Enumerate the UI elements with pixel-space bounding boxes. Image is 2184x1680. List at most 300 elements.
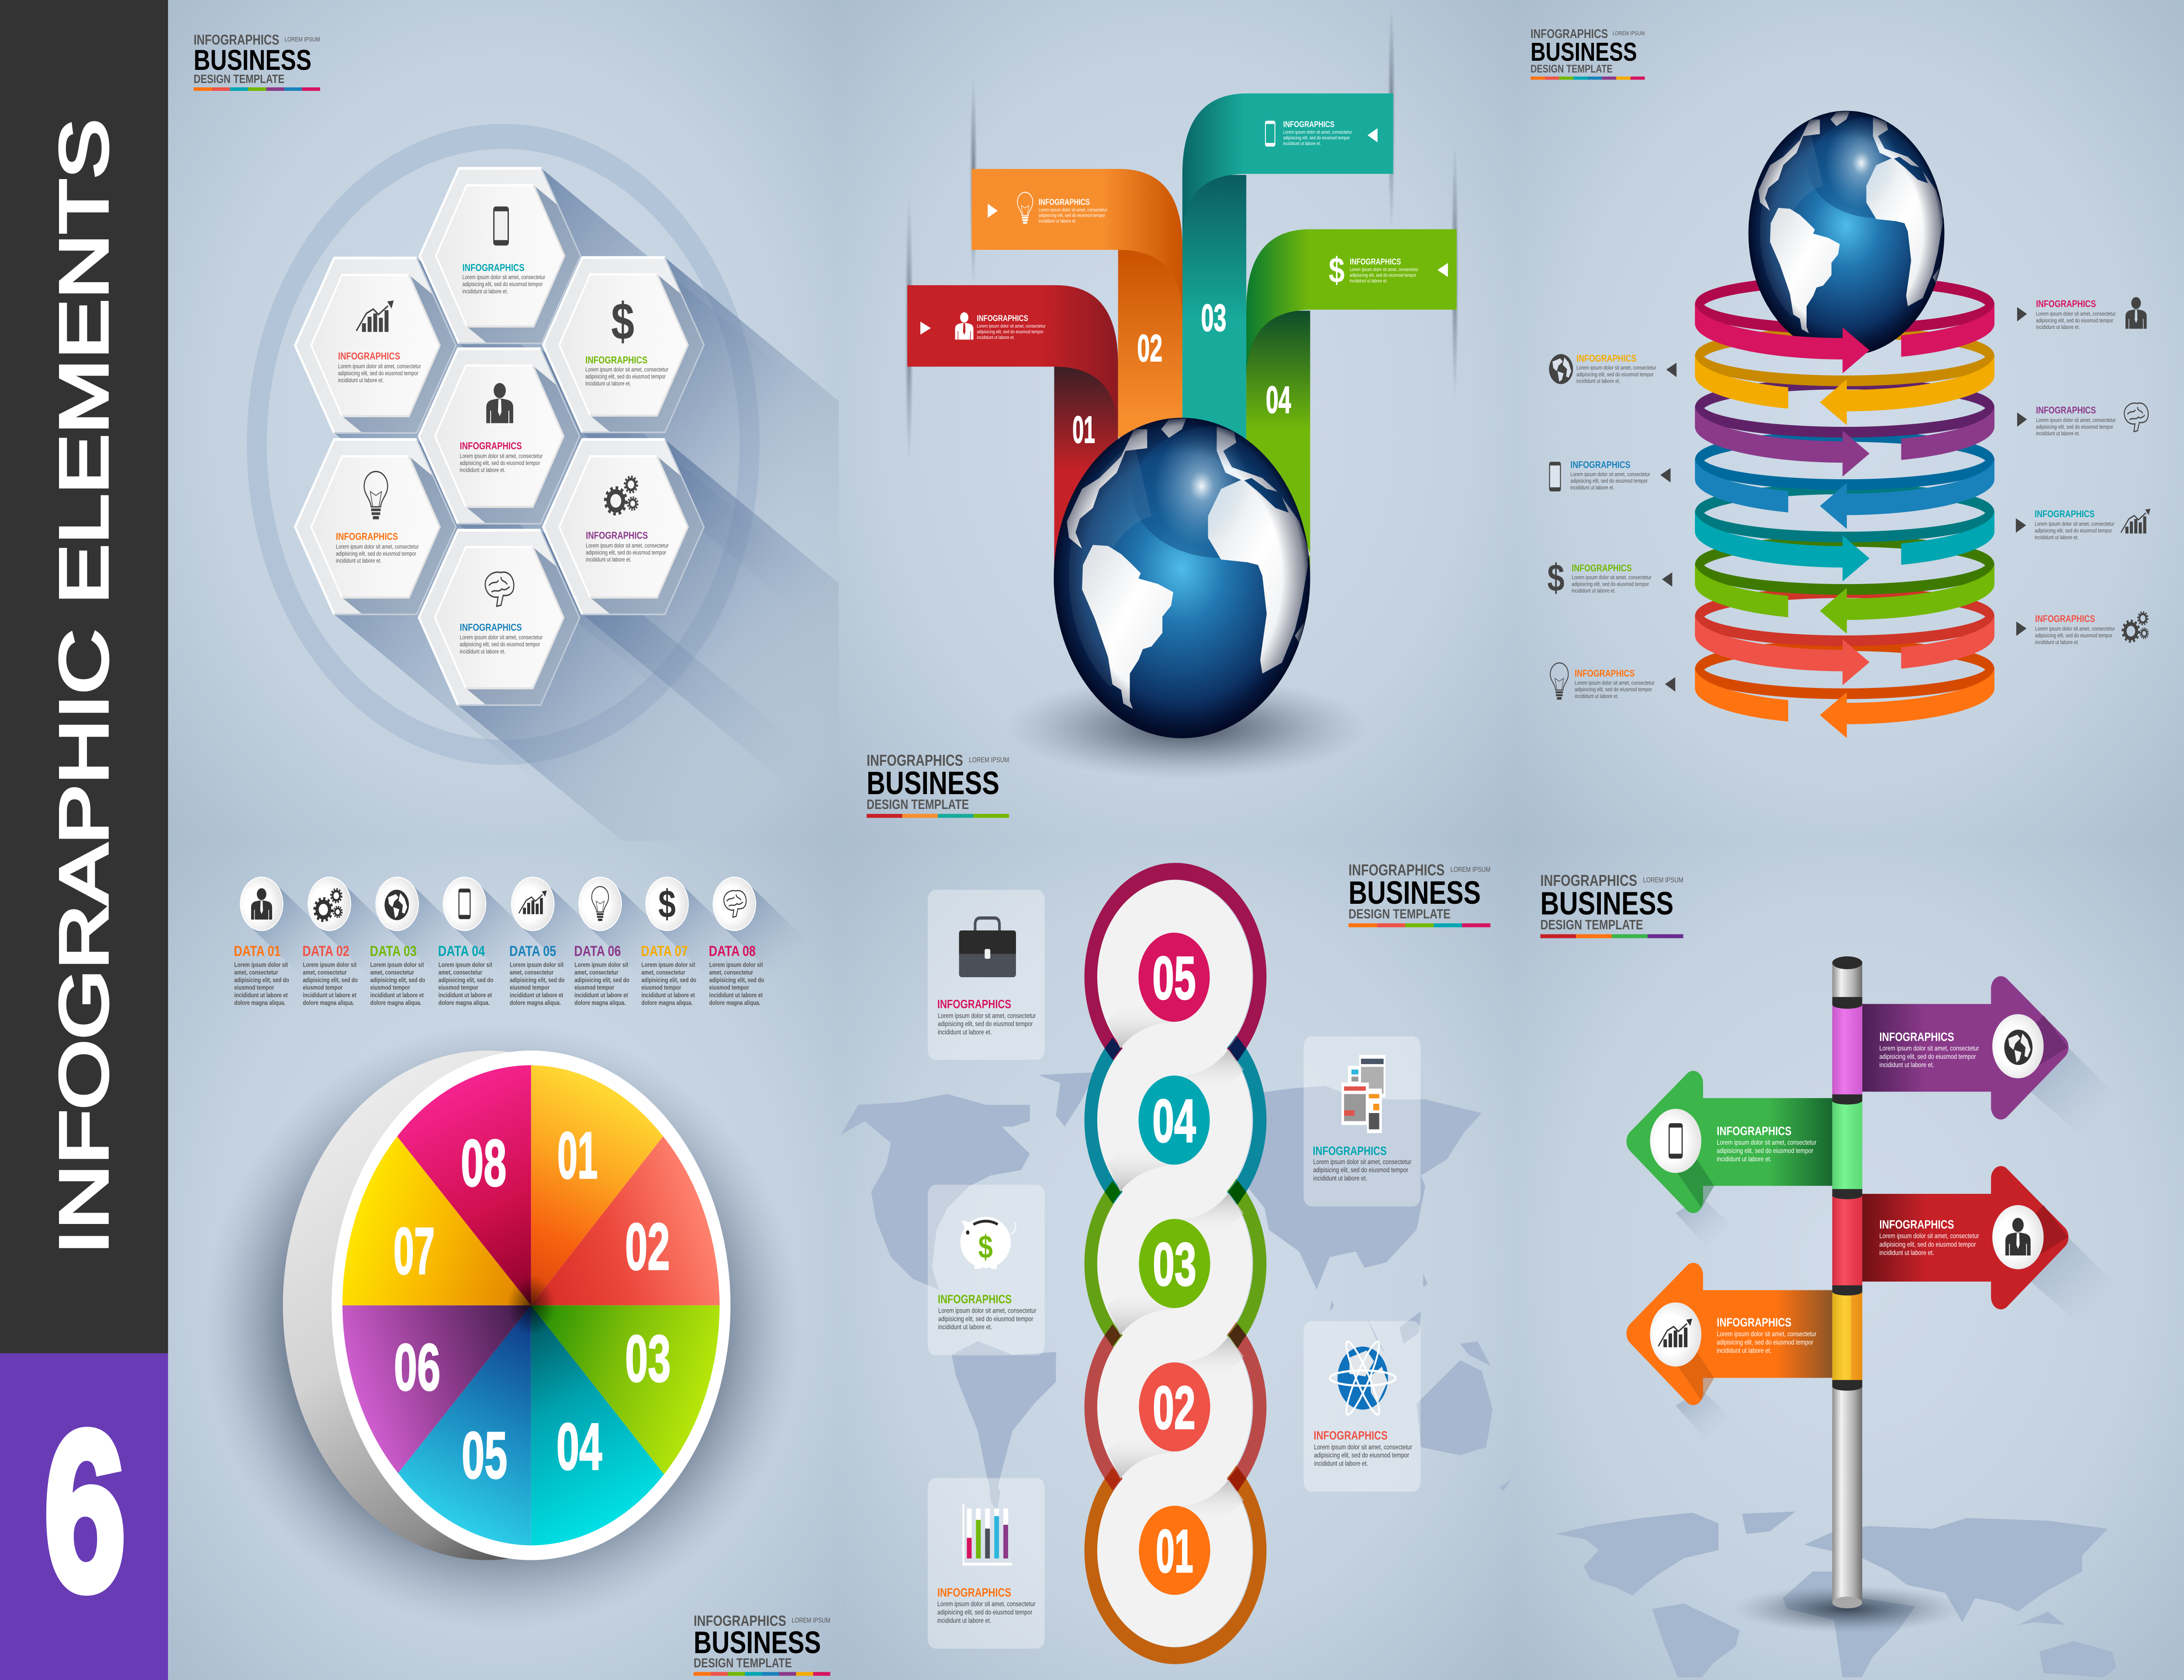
icon: piggy bank [961,1217,1016,1269]
globe [1749,111,1944,356]
data 08: eiusmod tempor [709,984,749,991]
logo: panel 3: INFOGRAPHICS [1531,26,1608,41]
text: centre hexagon: INFOGRAPHICS [460,441,522,452]
right arrow 1 [2017,307,2027,321]
text: right 2: Lorem ipsum dolor sit amet, consectetur [2036,417,2116,423]
text: left lower hexagon: incididunt ut labore et. [336,557,381,564]
panel: pie wheel [169,841,840,1680]
world map [1556,1511,2116,1677]
badge 05: 05 [1152,944,1196,1012]
text: right 3: incididunt ut labore et. [2035,534,2079,541]
logo: panel 1: LOREM IPSUM [284,36,320,43]
number 04: 04 [1266,379,1291,421]
data 05: Lorem ipsum dolor sit [510,961,564,968]
data 03: DATA 03 [370,943,417,959]
data 04: incididunt ut labore et [439,992,492,999]
badge 02 [1139,1362,1210,1452]
arrow: orange ribbon [988,204,998,218]
text: right 2 [2036,405,2116,437]
arrow: orange [1636,1275,1832,1400]
data 07: adipisicing elit, sed do [641,976,696,984]
data 01: DATA 01 [234,943,281,959]
text: orange ribbon: INFOGRAPHICS [1039,197,1090,207]
text: left lower hexagon [336,531,419,564]
text: orange arrow [1717,1316,1817,1355]
text: top hexagon [463,263,545,295]
text: right upper hexagon: adipisicing elit, sed do eiusmod tempor [585,373,666,380]
pie white rim [332,1051,730,1560]
data 07: incididunt ut labore et [641,992,695,999]
data 01 [234,877,289,1006]
text: left 4 [1575,668,1655,699]
number 03: 03 [625,1322,671,1396]
logo: panel 1 [194,32,320,91]
left arrow 4 [1665,677,1675,691]
icon: phone white [1265,121,1275,146]
text: orange ribbon: adipisicing elit, sed do eiusmod tempor [1039,213,1106,218]
text: green arrow [1717,1124,1817,1163]
data 02: DATA 02 [302,943,349,959]
ring 7 coral [1695,593,1994,685]
text: card 01: incididunt ut labore et. [937,1617,991,1625]
text: left 3: INFOGRAPHICS [1572,563,1632,574]
text: left lower hexagon: Lorem ipsum dolor sit amet, consectetur [336,543,419,550]
text: orange arrow: Lorem ipsum dolor sit amet, consectetur [1717,1331,1817,1338]
text: left lower hexagon: adipisicing elit, sed do eiusmod tempor [336,550,416,557]
logo: panel 3: DESIGN TEMPLATE [1531,63,1613,75]
data 07: amet, consectetur [641,969,685,976]
text: right 4: INFOGRAPHICS [2035,614,2095,625]
text: left upper hexagon: incididunt ut labore et. [338,377,384,384]
text: card 04 [1313,1144,1411,1182]
data 06: incididunt ut labore et [574,992,628,999]
ring 2 yellow [1695,333,1994,425]
text: top hexagon: INFOGRAPHICS [463,263,525,273]
data 08: Lorem ipsum dolor sit [709,961,763,968]
pie side wall [283,1051,691,1560]
logo: panel 5: INFOGRAPHICS [1348,861,1444,879]
text: right 4: adipisicing elit, sed do eiusmod tempor [2035,633,2112,639]
data 04: DATA 04 [438,943,485,959]
text: green ribbon: Lorem ipsum dolor sit amet, consectetur [1350,267,1419,273]
arrow: red [1862,1179,2068,1297]
text: bottom hexagon: adipisicing elit, sed do eiusmod tempor [460,641,540,648]
data 07: $ [658,883,676,926]
data 02: amet, consectetur [303,969,347,976]
ribbon 01 red [907,285,1118,578]
signpost pole [1832,956,1862,1608]
text: red ribbon: INFOGRAPHICS [977,313,1028,323]
text: right 1 [2036,299,2116,330]
logo: panel 4: LOREM IPSUM [792,1617,830,1625]
text: right lower hexagon: INFOGRAPHICS [586,530,648,541]
logo: panel 5: BUSINESS [1348,875,1481,911]
badge 04 [1138,1075,1210,1165]
logo: panel 2: DESIGN TEMPLATE [867,797,969,812]
icon: dollar: $ [611,292,634,351]
text: left 4: Lorem ipsum dolor sit amet, consectetur [1575,680,1655,686]
text: card 05: Lorem ipsum dolor sit amet, consectetur [938,1012,1036,1020]
text: card 03: Lorem ipsum dolor sit amet, consectetur [938,1307,1037,1315]
data 01: amet, consectetur [234,969,278,976]
text: teal ribbon [1283,119,1352,146]
text: top hexagon: Lorem ipsum dolor sit amet, consectetur [463,274,545,281]
data 07: dolore magna aliqua. [641,999,693,1006]
text: orange ribbon: Lorem ipsum dolor sit amet, consectetur [1039,207,1108,213]
text: left lower hexagon: INFOGRAPHICS [336,531,398,543]
logo: panel 2 [867,751,1009,818]
ring 5 teal [1695,489,1994,581]
data 03: amet, consectetur [370,969,414,976]
sidebar: dark title bar [0,0,168,1353]
text: teal ribbon: Lorem ipsum dolor sit amet, consectetur [1283,130,1352,135]
data 08: incididunt ut labore et [709,992,763,999]
text: top hexagon: adipisicing elit, sed do eiusmod tempor [463,281,543,288]
text: red arrow: incididunt ut labore et. [1880,1249,1934,1257]
text: green ribbon: adipisicing elit, sed do eiusmod tempor [1350,273,1417,278]
text: card 04: incididunt ut labore et. [1313,1175,1367,1182]
number 01: 01 [1072,408,1095,451]
data 08: dolore magna aliqua. [709,999,760,1006]
right arrow 3 [2016,519,2026,533]
text: centre hexagon [460,441,543,474]
text: left 4: INFOGRAPHICS [1575,668,1635,679]
text: red arrow: adipisicing elit, sed do eiusmod tempor [1880,1241,1976,1248]
data 05: amet, consectetur [510,969,553,976]
data 01: dolore magna aliqua. [234,999,285,1006]
icon: brain [2124,403,2148,432]
badge 05 [1138,933,1210,1022]
text: purple arrow: INFOGRAPHICS [1880,1030,1954,1044]
text: right lower hexagon: Lorem ipsum dolor sit amet, consectetur [586,542,669,549]
logo: panel 4: DESIGN TEMPLATE [694,1656,792,1670]
big number 6: 6 [44,1385,126,1636]
text: card 01: adipisicing elit, sed do eiusmod tempor [937,1609,1033,1616]
data 02: dolore magna aliqua. [303,999,354,1006]
icon: bar chart [963,1504,1012,1566]
ring 8 orange [1695,646,1994,738]
icon: bulb [364,471,387,519]
left arrow 1 [1666,363,1676,377]
chain rings [1091,871,1260,1656]
globe [1054,418,1310,738]
logo: panel 1: DESIGN TEMPLATE [194,73,284,86]
icon: globe [1549,354,1573,384]
text: right 1: INFOGRAPHICS [2036,299,2096,309]
ring 4 blue [1695,436,1994,529]
text: right lower hexagon [586,530,669,563]
text: teal ribbon: incididunt ut labore et. [1283,141,1321,146]
text: left upper hexagon: INFOGRAPHICS [338,351,400,362]
text: card 02: adipisicing elit, sed do eiusmod tempor [1314,1452,1409,1459]
text: left 1: incididunt ut labore et. [1576,378,1620,384]
text: green arrow: Lorem ipsum dolor sit amet, consectetur [1717,1139,1817,1147]
text: card 04: adipisicing elit, sed do eiusmod tempor [1313,1166,1408,1174]
text: red ribbon [977,313,1046,340]
text: green arrow: incididunt ut labore et. [1717,1155,1772,1163]
data 06 [574,877,629,1006]
text: card 01: Lorem ipsum dolor sit amet, consectetur [937,1600,1036,1608]
icon: person [486,383,513,423]
data 02: incididunt ut labore et [303,992,356,999]
pole shadow [1732,1585,1963,1633]
text: left 1 [1576,353,1656,384]
data 08: amet, consectetur [709,969,753,976]
right arrow 2 [2017,412,2027,427]
text: green ribbon: INFOGRAPHICS [1350,257,1401,266]
text: left 2: incididunt ut labore et. [1570,484,1614,491]
logo: panel 6: BUSINESS [1540,885,1673,922]
white discs [1097,880,1252,1647]
data 05: adipisicing elit, sed do [510,976,565,984]
text: left 3: incididunt ut labore et. [1572,588,1616,594]
text: orange ribbon [1039,197,1108,224]
text: centre hexagon: adipisicing elit, sed do eiusmod tempor [460,460,540,467]
data 05 [509,877,565,1006]
pie wedges [342,1065,719,1545]
logo: panel 3: LOREM IPSUM [1613,30,1645,37]
text: left 3: Lorem ipsum dolor sit amet, consectetur [1572,574,1652,581]
data 01: Lorem ipsum dolor sit [234,961,288,968]
icon: atom globe [1330,1338,1396,1418]
arrow shadows [1676,1047,2125,1443]
text: left 3: adipisicing elit, sed do eiusmod tempor [1572,581,1649,588]
data 03: adipisicing elit, sed do [370,976,425,984]
data 02: eiusmod tempor [303,984,343,991]
badge 01: 01 [1156,1517,1193,1585]
text: red arrow: INFOGRAPHICS [1880,1218,1954,1231]
icon: gears [605,477,638,514]
number 07: 07 [394,1214,435,1288]
text: orange arrow: adipisicing elit, sed do eiusmod tempor [1717,1339,1813,1346]
data 05: DATA 05 [509,943,556,959]
data 01: adipisicing elit, sed do [234,976,289,984]
text: card 02: INFOGRAPHICS [1313,1429,1388,1442]
text: left 1: adipisicing elit, sed do eiusmod tempor [1576,371,1654,378]
text: right 4 [2035,614,2115,646]
data 07: eiusmod tempor [641,984,681,991]
number 06: 06 [394,1331,440,1404]
text: left 1: Lorem ipsum dolor sit amet, consectetur [1576,365,1656,371]
text: card 03: incididunt ut labore et. [938,1324,992,1331]
data 04: eiusmod tempor [439,984,478,991]
data 08: adipisicing elit, sed do [709,976,764,984]
text: bottom hexagon: Lorem ipsum dolor sit amet, consectetur [460,634,543,641]
text: red ribbon: adipisicing elit, sed do eiusmod tempor [977,329,1044,335]
logo: panel 2: BUSINESS [867,765,999,802]
text: left 3 [1572,563,1652,594]
data 06: DATA 06 [574,943,621,959]
text: right lower hexagon: adipisicing elit, sed do eiusmod tempor [586,549,666,556]
text: card 05 [937,998,1036,1036]
ring 1 front pink [1695,302,1994,373]
data 04: dolore magna aliqua. [439,999,490,1006]
world map [841,1072,1512,1512]
number 02: 02 [1137,327,1162,370]
data 02: Lorem ipsum dolor sit [303,961,357,968]
icon: phone [1549,462,1561,491]
data 07: Lorem ipsum dolor sit [641,961,695,968]
text: right 3: Lorem ipsum dolor sit amet, consectetur [2035,521,2115,527]
text: left upper hexagon [338,351,421,384]
text: left 2: Lorem ipsum dolor sit amet, consectetur [1570,471,1650,477]
badge 03 [1139,1219,1210,1308]
text: red ribbon: incididunt ut labore et. [977,335,1015,340]
arrow: green ribbon [1438,263,1448,277]
icon: chart [356,301,394,332]
text: right 1: adipisicing elit, sed do eiusmod tempor [2036,318,2113,324]
text: card 01 [937,1586,1036,1625]
badge 02: 02 [1153,1374,1196,1441]
text: green ribbon: incididunt ut labore et. [1350,279,1388,284]
data 02: adipisicing elit, sed do [303,976,358,984]
ribbon 03 teal [1182,93,1393,441]
icon: brain [485,572,514,606]
ribbon 02 orange [971,169,1182,437]
logo: panel 1: BUSINESS [194,44,311,76]
text: right 4: incididunt ut labore et. [2035,639,2079,646]
data 04: adipisicing elit, sed do [439,976,493,984]
data 06: Lorem ipsum dolor sit [574,961,629,968]
text: centre hexagon: incididunt ut labore et. [460,467,505,474]
number 01: 01 [557,1119,598,1193]
panel: hexagon infographic [169,0,839,841]
number 02: 02 [625,1210,670,1284]
ribbon 04 green [1246,229,1457,577]
text: card 05: incididunt ut labore et. [938,1029,992,1036]
logo: panel 2: INFOGRAPHICS [867,751,963,769]
text: left 1: INFOGRAPHICS [1576,353,1636,364]
panel: globe and rings [1515,0,2184,841]
logo: panel 6: INFOGRAPHICS [1540,871,1637,889]
sidebar: purple number block [0,1353,168,1680]
text: orange arrow: incididunt ut labore et. [1717,1347,1772,1355]
text: right 2: incididunt ut labore et. [2036,431,2080,437]
text: card 05: adipisicing elit, sed do eiusmod tempor [938,1020,1033,1028]
text: teal ribbon: adipisicing elit, sed do eiusmod tempor [1283,135,1350,141]
data 06: adipisicing elit, sed do [574,976,629,984]
ring 1 back pink [1699,281,1990,329]
badge 04: 04 [1152,1087,1196,1155]
icon: bulb white [1017,192,1033,224]
text: right 1: incididunt ut labore et. [2036,324,2080,330]
icon: phone [493,207,509,245]
text: left 2 [1570,460,1650,491]
text: card 02: Lorem ipsum dolor sit amet, consectetur [1314,1444,1412,1451]
text: card 04: INFOGRAPHICS [1313,1144,1387,1158]
info cards [928,890,1420,1649]
data 08: DATA 08 [709,943,756,959]
text: right 3 [2035,509,2115,541]
left arrow 2 [1660,468,1670,482]
text: card 05: INFOGRAPHICS [937,998,1011,1011]
text: right upper hexagon: Lorem ipsum dolor sit amet, consectetur [585,366,668,373]
icon: gears [2123,612,2148,641]
text: right upper hexagon: INFOGRAPHICS [585,355,647,366]
badge 03: 03 [1153,1230,1196,1298]
ring 3 purple [1695,384,1994,477]
right arrow 4 [2016,622,2027,636]
text: right 2: INFOGRAPHICS [2036,405,2096,416]
text: card 03 [938,1293,1037,1331]
icon: documents [1341,1055,1386,1133]
data 08 [709,877,764,1006]
logo: panel 5: DESIGN TEMPLATE [1348,906,1451,921]
text: card 04: Lorem ipsum dolor sit amet, consectetur [1313,1158,1411,1166]
data 06: dolore magna aliqua. [574,999,625,1006]
text: bottom hexagon: incididunt ut labore et. [460,648,505,655]
data 06: eiusmod tempor [574,984,614,991]
text: red arrow: Lorem ipsum dolor sit amet, consectetur [1880,1232,1979,1240]
data 05: eiusmod tempor [510,984,549,991]
logo: panel 5: LOREM IPSUM [1451,866,1490,874]
data 03 [370,877,425,1006]
text: top hexagon: incididunt ut labore et. [463,288,508,295]
logo: panel 3 [1531,26,1645,80]
text: left upper hexagon: adipisicing elit, sed do eiusmod tempor [338,370,418,377]
ring junction diamonds [1105,1037,1246,1492]
panel: ribbons and globe [839,0,1515,841]
text: right lower hexagon: incididunt ut labore et. [586,556,631,563]
text: green arrow: INFOGRAPHICS [1717,1124,1791,1138]
text: left 4: adipisicing elit, sed do eiusmod tempor [1575,687,1652,693]
arrow: red ribbon [920,321,931,335]
text: left 4: incididunt ut labore et. [1575,693,1619,699]
logo: panel 3: BUSINESS [1531,38,1637,66]
disc fold shadows [1107,1002,1244,1521]
text: right 2: adipisicing elit, sed do eiusmod tempor [2036,424,2113,430]
text: card 03: INFOGRAPHICS [938,1293,1012,1306]
text: bottom hexagon: INFOGRAPHICS [460,622,522,633]
logo: panel 6: DESIGN TEMPLATE [1540,917,1643,932]
number 05: 05 [462,1419,507,1493]
text: right 1: Lorem ipsum dolor sit amet, consectetur [2036,311,2116,317]
data 05: dolore magna aliqua. [510,999,561,1006]
text: purple arrow: Lorem ipsum dolor sit amet, consectetur [1880,1045,1979,1052]
text: card 01: INFOGRAPHICS [937,1586,1011,1599]
logo: panel 4: BUSINESS [694,1625,821,1660]
text: card 02 [1313,1429,1412,1468]
logo: panel 6 [1540,871,1683,938]
data 03: incididunt ut labore et [370,992,424,999]
text: card 02: incididunt ut labore et. [1314,1460,1368,1468]
text: card 03: adipisicing elit, sed do eiusmod tempor [938,1315,1033,1323]
text: right 3: adipisicing elit, sed do eiusmod tempor [2035,528,2112,534]
data 04 [438,877,493,1006]
data 04: Lorem ipsum dolor sit [439,961,492,968]
data 06: amet, consectetur [574,969,619,976]
number 04: 04 [556,1410,602,1484]
logo: panel 6: LOREM IPSUM [1643,876,1683,884]
arrow: purple [1862,989,2068,1107]
data 07 [641,877,696,1006]
icon: dollar white: $ [1329,250,1344,290]
text: left 2: adipisicing elit, sed do eiusmod tempor [1570,478,1648,484]
icon row shadows [246,885,814,985]
arrow: green [1636,1083,1832,1208]
logo: panel 1: INFOGRAPHICS [194,32,279,48]
text: centre hexagon: Lorem ipsum dolor sit amet, consectetur [460,453,543,460]
text: purple arrow: adipisicing elit, sed do eiusmod tempor [1880,1053,1976,1061]
text: left upper hexagon: Lorem ipsum dolor sit amet, consectetur [338,363,421,370]
panel: signpost arrows [1515,841,2184,1680]
text: green ribbon [1350,257,1419,284]
sidebar title: INFOGRAPHIC ELEMENTS [46,119,122,1255]
logo: panel 5 [1348,861,1490,927]
text: teal ribbon: INFOGRAPHICS [1283,119,1334,129]
text: left 2: INFOGRAPHICS [1570,460,1631,470]
text: purple arrow [1880,1030,1979,1069]
